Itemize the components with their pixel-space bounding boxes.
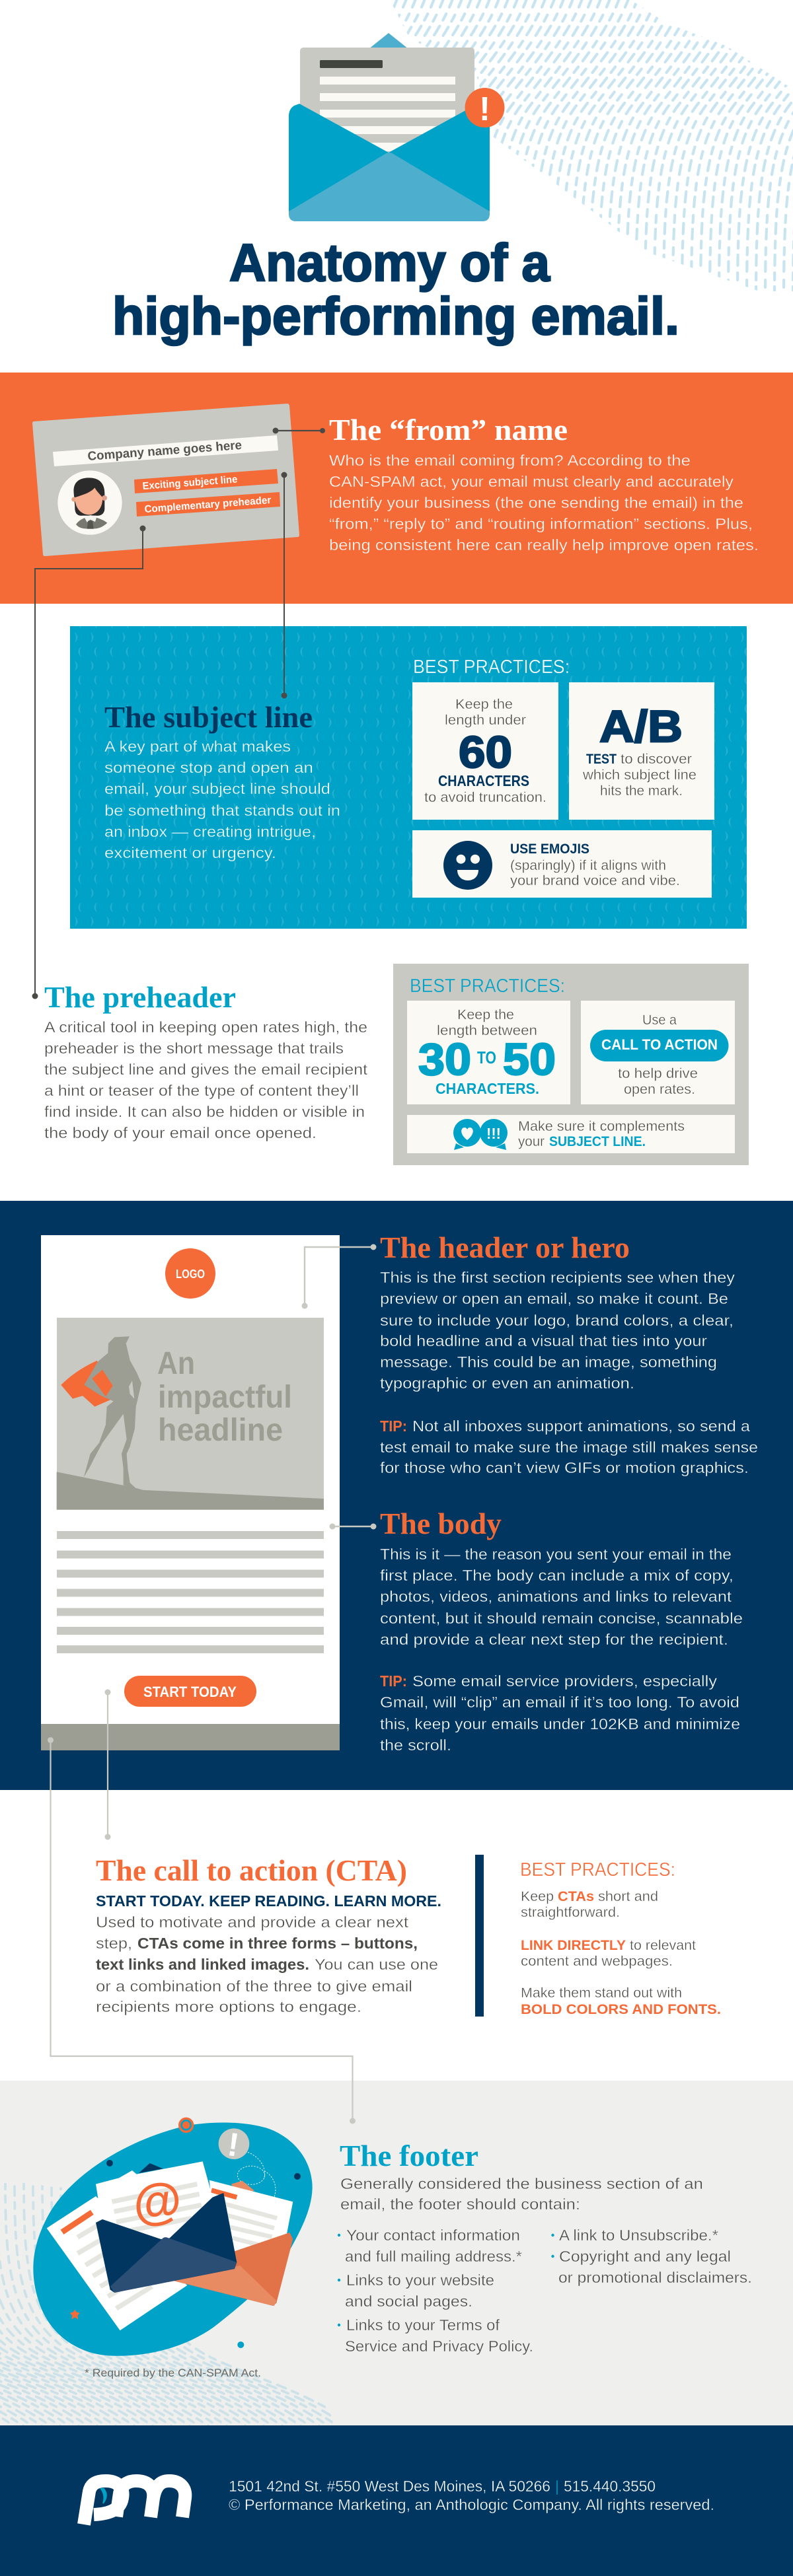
body: the call to action: recipients more options to engage. [96,1998,361,2015]
body: the call to action: You can use one [315,1956,438,1973]
body: the preheader [44,1019,368,1141]
list: footer contents left: Links to your website [346,2272,494,2289]
list: footer contents right [551,2227,752,2286]
tip: animations: TIP: [380,1417,407,1435]
body: the preheader: the body of your email once opened. [44,1124,317,1141]
panel: the subject line [70,626,747,929]
card: 30 to 50 characters: CHARACTERS. [435,1080,539,1097]
body: the call to action: CTAs come in three forms – buttons, [137,1935,418,1952]
icon: avatar [57,470,122,535]
body: the body: content, but it should remain concise, scannable [380,1610,743,1627]
body: the from name: CAN-SPAM act, your email must clearly and accurately [329,473,734,490]
heading: the preheader: The preheader [44,980,236,1014]
card: 60 characters: CHARACTERS [438,772,529,789]
panel: cta best practices: straightforward. [521,1905,620,1920]
card: call to action [581,1001,735,1104]
body: the body: and provide a clear next step for the recipient. [380,1631,728,1648]
title [112,233,679,345]
body: the call to action: Used to motivate and provide a clear next [96,1914,409,1931]
email preview card: Company name goes here [87,439,243,464]
tip: clipping: the scroll. [380,1736,451,1754]
icon: open envelope with alert: ! [479,90,490,127]
body: the from name: being consistent here can really help improve open rates. [329,536,759,554]
logo badge [165,1248,215,1299]
card: use emojis: your brand voice and vibe. [510,873,680,888]
body: the subject line: an inbox — creating intrigue, [104,823,316,840]
body: the subject line: be something that stands out in [104,802,340,819]
body: the footer intro [340,2175,703,2213]
title: high-performing email. [112,287,679,345]
tip: animations: for those who can’t view GIFs or motion graphics. [380,1459,749,1476]
illustration: envelopes on blob [33,2118,313,2356]
card: use emojis [412,830,712,898]
panel: cta best practices: short and [598,1889,658,1904]
card: A/B test: to discover [621,752,692,767]
tip: clipping: Gmail, will “clip” an email if it’s too long. To avoid [380,1694,739,1711]
icon: speech bubbles [453,1119,508,1150]
connector: subject line [282,472,287,699]
body: the header or hero: preview or open an email, so make it count. Be [380,1290,728,1307]
email preview card: Exciting subject line [142,474,238,492]
card: complements subject line [407,1115,735,1153]
card: 30 to 50 characters: TO [477,1048,496,1067]
list: footer contents left [338,2227,533,2355]
card: 60 characters: to avoid truncation. [424,790,547,805]
connector: preheader [32,526,145,999]
body: the body: This is it — the reason you sent your email in the [380,1546,732,1563]
card: A/B test: TEST [586,752,617,767]
list: footer contents right: Copyright and any legal [559,2248,731,2265]
logo: pm [84,2481,185,2524]
company address: 515.440.3550 [564,2478,656,2495]
logo badge: LOGO [176,1268,205,1281]
body: the body: photos, videos, animations and links to relevant [380,1588,732,1605]
body: the header or hero: message. This could be an image, something [380,1353,717,1371]
card: use emojis: (sparingly) if it aligns with [510,858,666,873]
illustration: envelopes on blob: @ [130,2171,184,2231]
list: footer contents left: Your contact information [346,2227,520,2244]
panel: preheader best practices [393,964,749,1165]
heading: the from name: The “from” name [329,413,568,447]
card: A/B test: hits the mark. [600,783,683,799]
body: the header or hero: sure to include your logo, brand colors, a clear, [380,1312,734,1329]
body: the header or hero: typographic or even an animation. [380,1375,634,1392]
card: complements subject line: SUBJECT LINE. [549,1134,646,1149]
connector: footer [48,1737,356,2124]
email mockup [41,1235,340,1750]
list: footer contents left: Links to your Terms of [346,2316,500,2334]
button: start today [124,1676,256,1707]
card: 60 characters: Keep the [455,697,513,712]
footnote: * Required by the CAN-SPAM Act. [85,2367,261,2379]
card: use emojis: USE EMOJIS [510,841,589,857]
body copy lines [57,1531,324,1653]
body: the preheader: A critical tool in keeping open rates high, the [44,1019,367,1036]
tip: animations: Not all inboxes support animations, so send a [412,1417,750,1435]
panel: cta best practices: CTAs [558,1889,594,1904]
card: 60 characters [412,682,558,820]
heading: the subject line: The subject line [104,700,313,734]
panel: cta best practices: to relevant [630,1938,696,1953]
card: call to action: to help drive [618,1066,698,1081]
panel: cta best practices [520,1859,721,2017]
list: footer contents right: A link to Unsubscribe.* [559,2227,718,2244]
card: 60 characters: length under [445,713,526,728]
heading: the call to action: The call to action (CTA) [96,1853,407,1887]
body: the header or hero: bold headline and a visual that ties into your [380,1332,707,1349]
hero image: headline [158,1413,283,1448]
card: 30 to 50 characters [407,1001,570,1104]
email preview card: Complementary preheader [144,495,272,515]
decorative dash texture: top right [393,0,793,291]
company address: | [555,2478,559,2495]
list: footer contents left: Service and Privacy Policy. [345,2338,533,2355]
panel: the from name [0,373,793,604]
tip: clipping: TIP: [380,1672,407,1690]
card: 30 to 50 characters: 50 [503,1034,556,1085]
card: complements subject line: Make sure it complements [518,1119,685,1134]
connector: header [301,1244,377,1309]
body: the from name: identify your business (the one sending the email) in the [329,494,743,511]
tip: clipping [380,1672,740,1754]
hero image [57,1318,324,1510]
divider bar [475,1855,484,2017]
card: 30 to 50 characters: length between [437,1023,537,1038]
card: A/B test: which subject line [582,768,697,783]
hero image: An [157,1346,195,1381]
card: A/B test [569,682,714,820]
connector: call to action [104,1690,111,1840]
connector: from name [276,430,322,431]
decorative dash texture: footer [0,2183,337,2425]
panel: cta best practices: Make them stand out with [521,1986,682,2001]
subhead: start today keep reading learn more: START TODAY. KEEP READING. LEARN MORE. [96,1892,441,1910]
icon: speech bubbles: !!! [486,1125,501,1142]
hero image: impactful [158,1380,292,1415]
body: the preheader: the subject line and gives the email recipient [44,1061,368,1078]
body: the call to action: or a combination of the three to give email [96,1978,412,1995]
company address: 1501 42nd St. #550 West Des Moines, IA 50266 [229,2478,550,2495]
body: the preheader: find inside. It can also be hidden or visible in [44,1103,365,1120]
list: footer contents left: and full mailing address.* [345,2248,522,2265]
card: call to action: Use a [642,1013,677,1028]
tip: clipping: this, keep your emails under 102KB and minimize [380,1715,740,1733]
card: 30 to 50 characters: Keep the [457,1007,514,1022]
body: the body: first place. The body can include a mix of copy, [380,1567,734,1584]
card: A/B test: A/B [599,701,683,752]
body: the subject line: A key part of what makes [104,738,291,755]
body: the footer intro: email, the footer should contain: [340,2196,580,2213]
body: the call to action: step, [96,1935,132,1952]
company address [229,2478,714,2513]
panel: cta best practices: BOLD COLORS AND FONTS. [521,2002,721,2017]
heading: best practices: BEST PRACTICES: [410,976,565,997]
connector: body [329,1523,377,1530]
title: Anatomy of a [229,233,550,292]
heading: best practices: BEST PRACTICES: [520,1859,675,1880]
heading: the body: The body [380,1507,502,1540]
panel: the footer band [0,2081,793,2464]
body: the call to action: text links and linked images. [96,1956,309,1973]
card: call to action: open rates. [624,1082,695,1097]
card: 30 to 50 characters: 30 [418,1034,471,1085]
body: the footer intro: Generally considered the business section of an [340,2175,703,2192]
body: the from name: “from,” “reply to” and “routing information” sections. Plus, [329,515,753,532]
icon: open envelope with alert [289,33,505,221]
heading: the header or hero: The header or hero [380,1231,630,1264]
company address: © Performance Marketing, an Anthologic Company. All rights reserved. [229,2496,714,2513]
body: the preheader: a hint or teaser of the type of content they’ll [44,1082,359,1099]
icon: smiley [443,841,492,890]
tip: animations [380,1417,758,1476]
panel: cta best practices: LINK DIRECTLY [521,1938,626,1953]
body: the body [380,1546,743,1648]
email preview card [32,404,325,556]
list: footer contents right: or promotional disclaimers. [558,2269,752,2286]
panel: cta best practices: Keep [521,1889,554,1904]
body: the call to action [96,1914,438,2015]
body: the preheader: preheader is the short message that trails [44,1040,344,1057]
card: call to action: CALL TO ACTION [601,1036,718,1053]
button: start today: START TODAY [143,1684,237,1700]
body: the subject line: excitement or urgency. [104,844,276,861]
body: the subject line [104,738,340,861]
tip: animations: test email to make sure the image still makes sense [380,1439,758,1456]
panel: company footer [0,2425,793,2576]
heading: best practices: BEST PRACTICES: [413,657,570,678]
body: the header or hero [380,1269,736,1392]
tip: clipping: Some email service providers, especially [412,1672,718,1690]
list: footer contents left: and social pages. [345,2293,472,2310]
panel: header and body band [0,1201,793,1790]
body: the header or hero: This is the first section recipients see when they [380,1269,736,1286]
illustration: envelopes on blob: ! [225,2126,241,2164]
body: the from name: Who is the email coming from? According to the [329,452,691,469]
heading: the footer: The footer [340,2139,478,2172]
panel: cta best practices: content and webpages. [521,1954,673,1969]
body: the from name [329,452,759,554]
body: the subject line: email, your subject line should [104,780,330,797]
card: complements subject line: your [518,1134,545,1149]
card: 60 characters: 60 [459,727,512,777]
body: the subject line: someone stop and open an [104,759,313,776]
